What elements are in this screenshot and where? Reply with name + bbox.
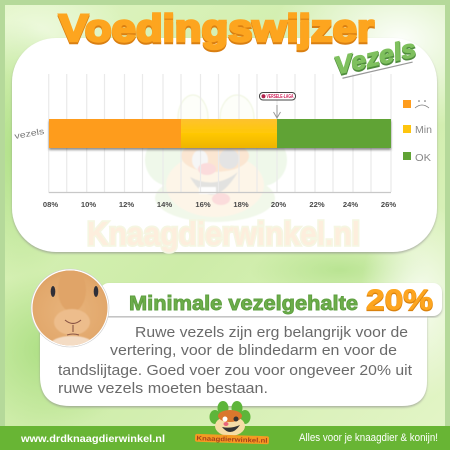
- panel: description text: [40, 316, 427, 406]
- legend item: Min: Min: [415, 124, 432, 136]
- axis tick labels: 22%: [309, 200, 325, 209]
- text block: description: Ruwe vezels zijn erg belangrijk voor de: [135, 325, 408, 341]
- logo: [195, 401, 269, 445]
- text block: description: tandslijtage. Goed voer zou voor ongeveer 20% uit: [58, 363, 412, 379]
- grid lines: [49, 74, 391, 192]
- heading: Minimale vezelgehalte: Minimale vezelgehalte: [129, 293, 358, 315]
- logo: Knaagdierwinkel.nl: [196, 435, 268, 445]
- watermark: mascot: [145, 95, 287, 222]
- marker: Versele-Laga badge: [260, 92, 296, 100]
- subtitle: Vezels: Vezels: [332, 36, 419, 82]
- axis tick labels: 08%: [43, 200, 58, 209]
- icon: rabbit photo: [30, 268, 110, 354]
- axis tick labels: 24%: [343, 200, 358, 209]
- panel: heading banner: [100, 283, 442, 318]
- marker: Versele-Laga badge: VERSELE-LAGA: [266, 94, 294, 100]
- axis tick labels: 26%: [381, 200, 396, 209]
- footer: website: www.drdknaagdierwinkel.nl: [20, 433, 165, 445]
- subtitle: Vezels: Vezels: [332, 34, 419, 80]
- legend item: sad: [403, 100, 429, 108]
- text block: description: [58, 325, 412, 397]
- heading: 20%: 20%: [366, 284, 433, 316]
- axis tick labels: 14%: [157, 200, 172, 209]
- legend: [403, 100, 432, 164]
- axis tick labels: 16%: [195, 200, 211, 209]
- axis label: vezels: vezels: [14, 126, 45, 141]
- title: Voedingswijzer: [59, 8, 374, 50]
- text block: description: ruwe vezels moeten bestaan.: [58, 381, 268, 397]
- title: Voedingswijzer: [59, 10, 374, 52]
- axis tick labels: 20%: [271, 200, 286, 209]
- footer bar: [0, 426, 450, 450]
- axis tick labels: 12%: [119, 200, 134, 209]
- arrow: marker to 20%: [274, 105, 280, 118]
- text block: description: vertering, voor de blindedarm en voor de: [110, 343, 397, 359]
- axis tick labels: 18%: [233, 200, 249, 209]
- panel: chart: [12, 38, 437, 252]
- watermark: shop name: Knaagdierwinkel.nl: [87, 215, 360, 252]
- legend item: OK: OK: [415, 152, 431, 164]
- heading: 20%: 20%: [366, 286, 433, 318]
- axis tick labels: [43, 200, 396, 209]
- bar chart: vezels: [49, 119, 391, 148]
- axis tick labels: 10%: [81, 200, 96, 209]
